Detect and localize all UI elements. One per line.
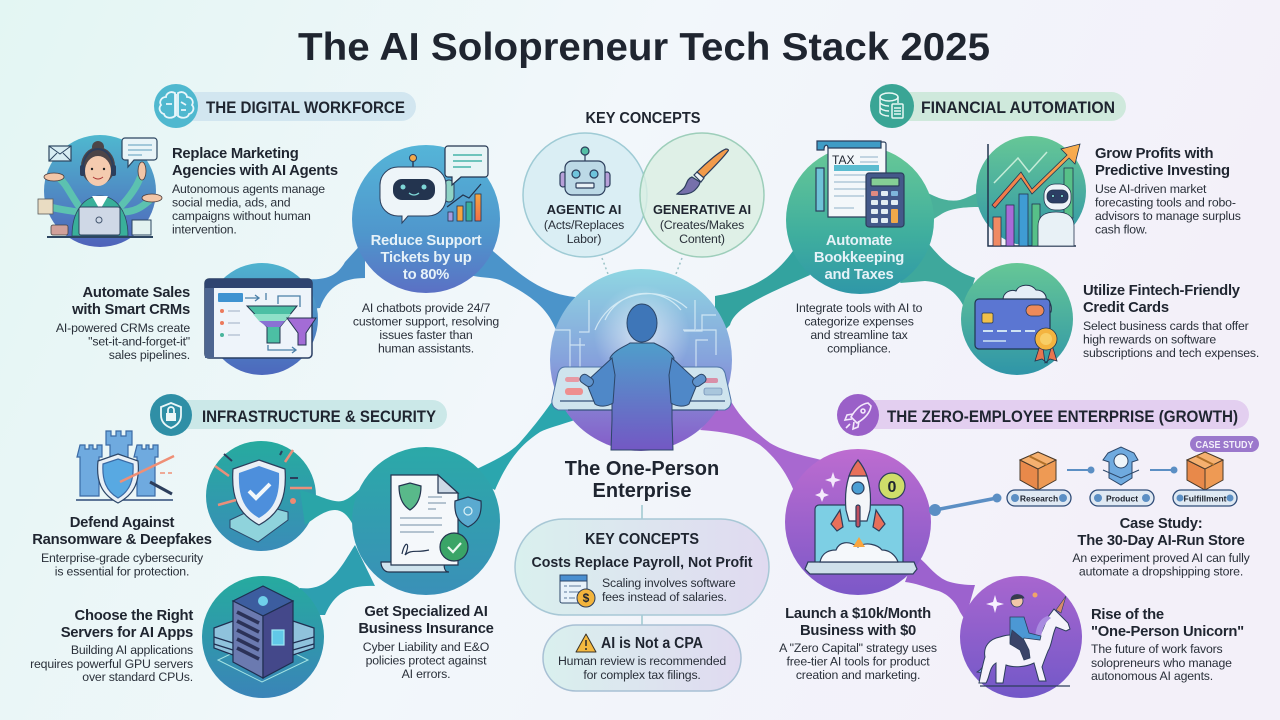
text: rise of the unicorn: Rise of the — [1091, 607, 1164, 623]
text: case study: Case Study: — [1120, 516, 1202, 532]
panel: costs replace payroll — [515, 519, 769, 615]
text: grow profits — [1095, 146, 1241, 236]
circle: agentic ai: AGENTIC AI — [547, 202, 621, 217]
heading: the one-person enterprise: Enterprise — [593, 480, 691, 502]
text: support description — [353, 301, 499, 356]
node: server illustration — [202, 576, 324, 698]
text: grow profits: cash flow. — [1095, 222, 1147, 236]
icon: brain — [160, 92, 193, 118]
icon: castle with shield — [76, 431, 174, 503]
circle: generative ai: (Creates/Makes — [660, 218, 744, 232]
text: support description: customer support, resolving — [353, 314, 499, 328]
flow: case study steps — [1007, 447, 1237, 506]
text: grow profits: forecasting tools and robo- — [1095, 196, 1236, 210]
text: defend against: Defend Against — [70, 515, 175, 531]
text: rise of the unicorn — [1091, 607, 1244, 683]
node: bookkeeping bubble: and Taxes — [824, 267, 894, 283]
text: fintech cards: Utilize Fintech-Friendly — [1083, 283, 1241, 299]
section heading: zero-employee enterprise: THE ZERO-EMPLOYEE ENTERPRISE (GROWTH) — [887, 407, 1238, 426]
text: rise of the unicorn: solopreneurs who manage — [1091, 656, 1232, 670]
text: insurance description: Business Insurance — [358, 621, 494, 637]
section heading: financial automation — [870, 84, 1126, 128]
icon: growth bars — [447, 184, 481, 221]
heading: the one-person enterprise — [565, 458, 719, 502]
icon: card — [975, 299, 1050, 349]
node: shield illustration — [206, 441, 316, 551]
panel: key concepts top — [523, 110, 764, 274]
panel: zero-employee enterprise — [779, 394, 1259, 698]
icon: funnels — [247, 306, 316, 345]
icon: fulfillment box — [1187, 452, 1223, 490]
text: bookkeeping description: categorize expenses — [804, 314, 914, 328]
circle: agentic ai: (Acts/Replaces — [544, 218, 624, 232]
text: launch description: creation and marketing. — [796, 668, 920, 682]
text: replace marketing agencies: Agencies with AI Agents — [172, 163, 338, 179]
text: fintech cards: subscriptions and tech expenses. — [1083, 346, 1259, 360]
text: choose servers: over standard CPUs. — [82, 670, 193, 684]
icon: speech bubble — [122, 138, 157, 167]
node: unicorn illustration — [960, 576, 1082, 698]
icon: chat bubble — [445, 146, 488, 185]
text: grow profits: Predictive Investing — [1095, 163, 1230, 179]
panel: costs replace payroll: Costs Replace Payroll, Not Profit — [532, 554, 752, 571]
node: marketing illustration — [38, 135, 162, 247]
text: bookkeeping description — [796, 301, 923, 356]
step: research — [1007, 490, 1071, 506]
node: credit card illustration — [961, 263, 1073, 375]
text: choose servers — [30, 608, 193, 684]
icon: laptop rocket — [805, 460, 917, 574]
panel: costs replace payroll: KEY CONCEPTS — [585, 531, 699, 548]
panel: ai is not a cpa: for complex tax filings. — [583, 668, 701, 682]
text: replace marketing agencies: Autonomous agents manage — [172, 182, 325, 196]
text: replace marketing agencies: intervention. — [172, 222, 237, 236]
text: case study: An experiment proved AI can fully — [1072, 551, 1251, 565]
icon: cloud — [1003, 285, 1051, 317]
icon: robot — [560, 147, 610, 195]
text: support description: human assistants. — [378, 342, 474, 356]
text: rise of the unicorn: The future of work favors — [1091, 642, 1223, 656]
console — [552, 367, 731, 410]
text: choose servers: Servers for AI Apps — [61, 625, 193, 641]
step: fulfillment: Fulfillment — [1184, 494, 1227, 504]
icon: rider — [1010, 594, 1041, 660]
connector: hub to digital workforce — [470, 235, 575, 340]
text: automate sales: Automate Sales — [82, 285, 190, 301]
text: rise of the unicorn: "One-Person Unicorn" — [1091, 624, 1244, 640]
panel: ai is not a cpa — [543, 625, 741, 691]
icon: rising arrow — [992, 144, 1080, 208]
icon: bill with dollar — [560, 575, 595, 607]
text: automate sales: sales pipelines. — [109, 348, 190, 362]
text: grow profits: Grow Profits with — [1095, 146, 1213, 162]
text: insurance description — [358, 604, 494, 681]
node: bookkeeping bubble: Automate — [826, 233, 892, 249]
text: support description: AI chatbots provide 24/7 — [362, 301, 490, 315]
panel: costs replace payroll: fees instead of salaries. — [602, 590, 727, 604]
section heading: infrastructure and security: INFRASTRUCTURE & SECURITY — [202, 407, 437, 426]
step: product — [1090, 490, 1154, 506]
icon: multi-armed agent — [38, 141, 162, 238]
text: launch description: free-tier AI tools for product — [787, 654, 930, 668]
text: replace marketing agencies: campaigns without human — [172, 209, 311, 223]
icon: unicorn — [979, 609, 1070, 683]
icon: product gear box — [1103, 447, 1139, 485]
text: insurance description: Cyber Liability and E&O — [363, 640, 489, 654]
text: launch description — [779, 606, 937, 682]
icon: laptop rocket: 0 — [888, 479, 897, 496]
text: case study: The 30-Day AI-Run Store — [1077, 533, 1245, 549]
circle: generative ai: GENERATIVE AI — [653, 202, 751, 217]
text: insurance description: Get Specialized AI — [364, 604, 488, 620]
icon: database and calculator — [880, 93, 903, 118]
text: choose servers: requires powerful GPU servers — [30, 657, 193, 671]
badge: case study — [1190, 436, 1259, 452]
node: crm illustration — [205, 263, 318, 375]
text: launch description: Business with $0 — [800, 623, 916, 639]
text: fintech cards: Credit Cards — [1083, 300, 1169, 316]
step: product: Product — [1106, 494, 1138, 504]
text: launch description: A "Zero Capital" strategy uses — [779, 641, 937, 655]
icon: server tower — [214, 586, 314, 678]
circle: agentic ai: Labor) — [567, 232, 601, 246]
section heading: financial automation: FINANCIAL AUTOMATION — [921, 98, 1115, 117]
text: replace marketing agencies — [172, 146, 338, 236]
text: automate sales: AI-powered CRMs create — [56, 321, 190, 335]
heading: key concepts: KEY CONCEPTS — [586, 110, 701, 127]
text: replace marketing agencies: Replace Marketing — [172, 146, 299, 162]
connector: hub to financial automation — [715, 240, 810, 340]
heading: the one-person enterprise: The One-Person — [565, 458, 719, 480]
text: grow profits: Use AI-driven market — [1095, 182, 1207, 196]
text: rise of the unicorn: autonomous AI agents. — [1091, 669, 1213, 683]
icon: tax sheet and calculator — [816, 141, 904, 227]
section heading: the digital workforce — [154, 84, 416, 128]
node: bookkeeping bubble — [786, 141, 995, 310]
icon: support robot — [380, 154, 454, 223]
panel: financial automation — [786, 84, 1259, 375]
node: insurance bubble — [300, 447, 500, 615]
text: grow profits: advisors to manage surplus — [1095, 209, 1241, 223]
icon: warning — [576, 634, 596, 652]
icon: lock shield — [161, 403, 181, 428]
figure: person at console — [578, 304, 708, 450]
text: defend against: is essential for protection. — [55, 564, 189, 578]
icon: research box — [1020, 452, 1056, 490]
section heading: infrastructure and security — [150, 394, 447, 436]
text: bookkeeping description: and streamline tax — [810, 328, 909, 342]
panel: costs replace payroll: Scaling involves software — [602, 576, 736, 590]
text: support description: issues faster than — [379, 328, 473, 342]
panel: ai is not a cpa: AI is Not a CPA — [601, 635, 703, 652]
circle: generative ai: Content) — [679, 232, 725, 246]
title: The AI Solopreneur Tech Stack 2025 — [298, 26, 990, 69]
icon: tax sheet and calculator: TAX — [832, 153, 854, 167]
panel: central hub — [550, 269, 732, 451]
text: choose servers: Building AI applications — [71, 643, 193, 657]
text: insurance description: policies protect against — [366, 654, 487, 668]
icon: bill with dollar: $ — [583, 591, 590, 605]
step: research: Research — [1020, 494, 1058, 504]
text: defend against: Enterprise-grade cybersecurity — [41, 551, 204, 565]
text: insurance description: AI errors. — [402, 667, 450, 681]
step: fulfillment — [1173, 490, 1237, 506]
circle: agentic ai — [523, 133, 647, 257]
icon: envelope — [49, 146, 71, 161]
node: support bubble — [300, 145, 500, 310]
circle: generative ai — [640, 133, 764, 257]
icon: rocket outline — [845, 403, 871, 429]
node: launch bubble — [785, 449, 975, 620]
text: defend against — [32, 515, 212, 578]
icon: advisor robot — [1038, 184, 1074, 246]
connector: hub to infrastructure — [465, 396, 575, 490]
text: fintech cards: Select business cards that offer — [1083, 319, 1249, 333]
section heading: zero-employee enterprise — [837, 394, 1249, 436]
section heading: the digital workforce: THE DIGITAL WORKFORCE — [206, 98, 405, 117]
panel: ai is not a cpa: Human review is recommended — [558, 654, 726, 668]
text: automate sales: "set-it-and-forget-it" — [88, 334, 190, 348]
text: case study: automate a dropshipping store. — [1079, 564, 1243, 578]
node: predictive investing illustration — [976, 136, 1086, 246]
text: bookkeeping description: Integrate tools with AI to — [796, 301, 923, 315]
text: launch description: Launch a $10k/Month — [785, 606, 931, 622]
badge: case study: CASE STUDY — [1196, 439, 1254, 451]
node: support bubble: Tickets by up — [380, 250, 472, 266]
panel: digital workforce — [38, 84, 500, 375]
text: defend against: Ransomware & Deepfakes — [32, 532, 212, 548]
circuit lines — [554, 293, 716, 370]
panel: infrastructure and security — [30, 394, 500, 698]
icon: medal — [1035, 328, 1057, 363]
icon: policy document — [381, 475, 481, 572]
node: bookkeeping bubble: Bookkeeping — [814, 250, 904, 266]
text: bookkeeping description: compliance. — [827, 342, 891, 356]
text: choose servers: Choose the Right — [75, 608, 193, 624]
text: automate sales: with Smart CRMs — [71, 302, 190, 318]
text: automate sales — [56, 285, 190, 362]
node: support bubble: Reduce Support — [371, 233, 482, 249]
node: support bubble: to 80% — [403, 267, 449, 283]
text: replace marketing agencies: social media, ads, and — [172, 196, 291, 210]
arrow: launch to case study — [929, 494, 1002, 516]
icon: paintbrush — [677, 149, 728, 194]
text: fintech cards: high rewards on software — [1083, 332, 1216, 346]
text: fintech cards — [1083, 283, 1259, 360]
text: case study — [1072, 516, 1251, 578]
connector: hub to zero-employee — [700, 396, 830, 510]
